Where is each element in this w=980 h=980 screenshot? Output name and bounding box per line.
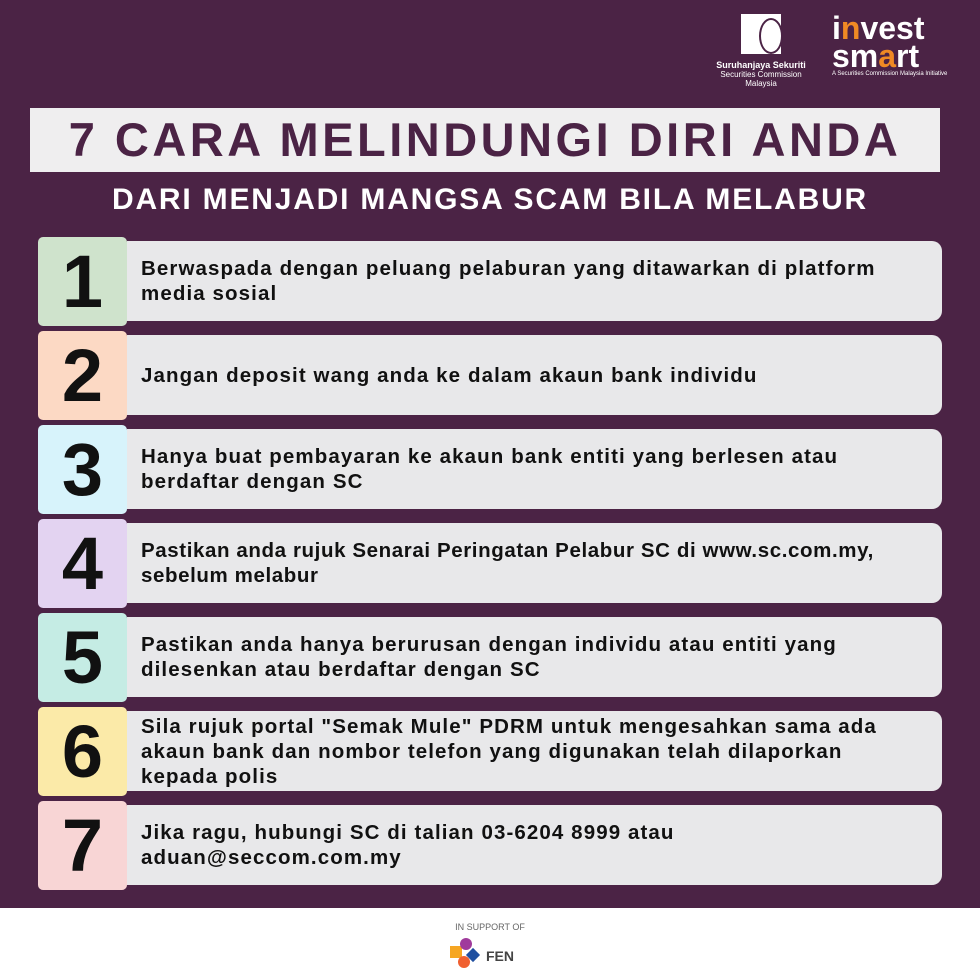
logo: InvestSmart: invest: [832, 10, 924, 46]
item 4: [38, 519, 942, 608]
logo: Securities Commission: Securities Commission: [720, 70, 802, 79]
item 7: 7: [62, 804, 103, 887]
item 6: 6: [62, 710, 103, 793]
footer text: IN SUPPORT OF: [455, 922, 525, 932]
footer: [0, 908, 980, 980]
item 7: Jika ragu, hubungi SC di talian 03-6204 8999 atau: [141, 821, 675, 844]
item 7: aduan@seccom.com.my: [141, 846, 402, 869]
item 1: media sosial: [141, 282, 277, 305]
item 2: [38, 331, 942, 420]
item 5: dilesenkan atau berdaftar dengan SC: [141, 658, 541, 681]
item 3: berdaftar dengan SC: [141, 470, 364, 493]
title banner: 7 CARA MELINDUNGI DIRI ANDA: [69, 113, 901, 166]
item 3: Hanya buat pembayaran ke akaun bank entiti yang berlesen atau: [141, 445, 838, 468]
item 1: 1: [62, 240, 103, 323]
item 4: 4: [62, 522, 103, 605]
logo: Securities Commission: Malaysia: [745, 79, 777, 88]
logo: InvestSmart: A Securities Commission Malaysia Initiative: [832, 71, 947, 77]
item 6: [38, 707, 942, 796]
item 5: [38, 613, 942, 702]
item 5: 5: [62, 616, 103, 699]
logo: Securities Commission: [716, 14, 806, 88]
subtitle: DARI MENJADI MANGSA SCAM BILA MELABUR: [112, 183, 868, 216]
logo: FEN: [450, 938, 514, 968]
item 4: Pastikan anda rujuk Senarai Peringatan Pelabur SC di www.sc.com.my,: [141, 539, 874, 562]
item 4: sebelum melabur: [141, 564, 319, 587]
item 2: Jangan deposit wang anda ke dalam akaun bank individu: [141, 364, 757, 386]
item 5: Pastikan anda hanya berurusan dengan individu atau entiti yang: [141, 633, 837, 656]
logo: Securities Commission: Suruhanjaya Sekuriti: [716, 60, 806, 70]
item 7: [38, 801, 942, 890]
item 3: 3: [62, 428, 103, 511]
item 6: kepada polis: [141, 764, 278, 788]
item 1: [38, 237, 942, 326]
logo: InvestSmart: [832, 10, 948, 77]
item 1: Berwaspada dengan peluang pelaburan yang ditawarkan di platform: [141, 257, 876, 280]
logo: InvestSmart: smart: [832, 38, 919, 74]
logo: FEN: FEN: [486, 948, 514, 964]
item 3: [38, 425, 942, 514]
item 6: Sila rujuk portal "Semak Mule" PDRM untuk mengesahkan sama ada: [141, 714, 877, 738]
item 6: akaun bank dan nombor telefon yang digunakan telah dilaporkan: [141, 740, 843, 762]
item 2: 2: [62, 334, 103, 417]
